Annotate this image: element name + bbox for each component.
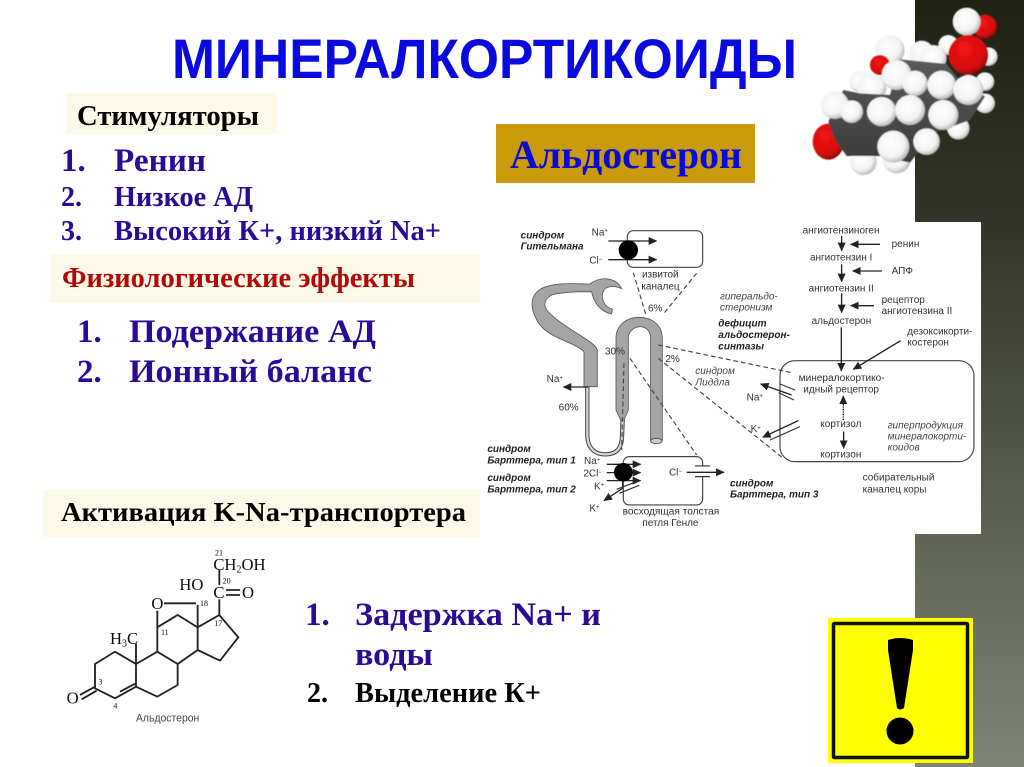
- panel: collecting duct and RAAS cascade: альдостерон: [812, 316, 871, 327]
- panel: stimulators heading: Стимуляторы: [77, 100, 259, 132]
- list: stimulators: Низкое АД: [114, 182, 253, 213]
- list: effects of activation: [305, 597, 601, 709]
- panel: distal convoluted tubule: −: [599, 257, 603, 263]
- chart: aldosterone structural formula: 4: [113, 701, 117, 710]
- panel: K-Na transporter heading: [43, 490, 480, 537]
- list: effects: 1.: [77, 314, 102, 350]
- panel: thick ascending limb: K: [594, 481, 601, 492]
- panel: thick ascending limb: Барттера, тип 2: [487, 485, 576, 496]
- panel: collecting duct and RAAS cascade: кортизон: [820, 450, 861, 461]
- panel: collecting duct and RAAS cascade: коидов: [888, 443, 920, 454]
- background side strip: [915, 0, 1024, 767]
- panel: collecting duct and RAAS cascade: кортизол: [820, 419, 862, 430]
- panel: nephron and receptor diagram: 2%: [665, 354, 680, 365]
- list: effects: Подержание АД: [129, 314, 376, 350]
- list: effects: Ионный баланс: [129, 354, 372, 390]
- chart: aldosterone structural formula: 2: [236, 565, 241, 576]
- panel: thick ascending limb: +: [596, 505, 600, 511]
- arrow: Na reabsorption 60%: [547, 374, 588, 413]
- chart: aldosterone structural formula: 21: [215, 548, 223, 557]
- list: stimulators: [61, 143, 441, 247]
- panel: distal convoluted tubule: синдром: [521, 231, 565, 242]
- chart: aldosterone structural formula: [67, 548, 266, 724]
- panel: K-Na transporter heading: Активация K-Na-транспортера: [61, 497, 467, 527]
- panel: aldosterone label: [496, 124, 755, 183]
- panel: thick ascending limb: +: [601, 483, 605, 489]
- panel: thick ascending limb: Cl: [669, 468, 678, 479]
- panel: distal convoluted tubule: [521, 227, 703, 315]
- chart: aldosterone structural formula: 18: [200, 599, 208, 608]
- panel: collecting duct and RAAS cascade: минералокортико-: [799, 373, 885, 384]
- panel: thick ascending limb: восходящая толстая: [623, 507, 719, 518]
- chart: aldosterone structural formula: 3: [98, 678, 102, 687]
- panel: thick ascending limb: −: [598, 470, 602, 476]
- list: stimulators: 1.: [61, 143, 86, 179]
- panel: nephron and receptor diagram: 30%: [605, 346, 625, 357]
- panel: nephron and receptor diagram: [487, 222, 981, 534]
- chart: aldosterone structural formula: 17: [214, 619, 222, 628]
- list: stimulators: 2.: [61, 182, 82, 213]
- list: stimulators: Высокий К+, низкий Na+: [114, 216, 441, 247]
- panel: thick ascending limb: [487, 444, 724, 529]
- panel: thick ascending limb: синдром: [487, 473, 531, 484]
- panel: collecting duct and RAAS cascade: стеронизм: [720, 303, 773, 314]
- list: effects of activation: Задержка Na+ и: [355, 597, 601, 633]
- chart: aldosterone structural formula: C: [213, 583, 224, 602]
- panel: collecting duct and RAAS cascade: каналец коры: [863, 484, 926, 495]
- panel: thick ascending limb: Na: [584, 456, 597, 467]
- panel: collecting duct and RAAS cascade: синдром: [730, 478, 774, 489]
- panel: nephron and receptor diagram: Лиддла: [694, 377, 730, 388]
- panel: collecting duct and RAAS cascade: АПФ: [892, 266, 913, 277]
- panel: collecting duct and RAAS cascade: ангиотензин II: [809, 283, 874, 294]
- diagram: nephron tubule: [532, 279, 662, 454]
- panel: collecting duct and RAAS cascade: синтазы: [718, 341, 765, 352]
- panel: thick ascending limb: −: [678, 469, 682, 475]
- panel: collecting duct and RAAS cascade: гиперальдо-: [720, 291, 778, 302]
- panel: collecting duct and RAAS cascade: минералокорти-: [888, 432, 967, 443]
- chart: aldosterone structural formula: CH: [213, 555, 236, 574]
- panel: collecting duct and RAAS cascade: Na: [747, 392, 759, 403]
- chart: aldosterone structural formula: OH: [241, 555, 266, 574]
- panel: collecting duct and RAAS cascade: [718, 225, 974, 501]
- panel: distal convoluted tubule: +: [604, 229, 608, 235]
- panel: collecting duct and RAAS cascade: +: [757, 425, 761, 431]
- list: effects of activation: 2.: [307, 678, 328, 709]
- panel: thick ascending limb: Барттера, тип 1: [487, 455, 576, 466]
- title: МИНЕРАЛКОРТИКОИДЫ: [172, 27, 797, 90]
- panel: collecting duct and RAAS cascade: костерон: [907, 337, 949, 348]
- panel: physiological effects heading: Физиологические эффекты: [62, 263, 415, 294]
- panel: collecting duct and RAAS cascade: дезоксикорти-: [907, 326, 972, 337]
- panel: physiological effects heading: [50, 254, 480, 303]
- list: stimulators: 3.: [61, 216, 82, 247]
- panel: thick ascending limb: 2Cl: [583, 469, 598, 480]
- panel: collecting duct and RAAS cascade: Барттера, тип 3: [730, 490, 819, 501]
- panel: collecting duct and RAAS cascade: собирательный: [863, 472, 934, 484]
- panel: nephron and receptor diagram: синдром: [695, 366, 735, 377]
- list: effects: 2.: [77, 354, 102, 390]
- panel: collecting duct and RAAS cascade: ангиотензина II: [882, 306, 952, 317]
- list: stimulators: Ренин: [114, 143, 206, 179]
- list: effects of activation: Выделение К+: [355, 678, 541, 709]
- panel: distal convoluted tubule: 6%: [648, 304, 663, 315]
- panel: collecting duct and RAAS cascade: дефицит: [718, 317, 767, 329]
- panel: distal convoluted tubule: Гительмана: [521, 242, 584, 253]
- chart: aldosterone structural formula: 3: [122, 639, 127, 650]
- panel: thick ascending limb: K: [589, 504, 596, 515]
- list: effects of activation: воды: [355, 637, 433, 673]
- panel: thick ascending limb: синдром: [487, 444, 531, 455]
- arrow: Na reabsorption 60%: 60%: [559, 402, 579, 413]
- panel: distal convoluted tubule: извитой: [642, 269, 679, 280]
- panel: collecting duct and RAAS cascade: ангиотензиноген: [803, 225, 879, 236]
- arrow: Na reabsorption 60%: Na: [547, 374, 559, 385]
- panel: collecting duct and RAAS cascade: ангиотензин I: [810, 253, 872, 264]
- panel: collecting duct and RAAS cascade: рецептор: [882, 295, 925, 306]
- chart: aldosterone structural formula: Альдостерон: [136, 712, 199, 724]
- panel: aldosterone label: Альдостерон: [510, 132, 742, 177]
- panel: collecting duct and RAAS cascade: альдостерон-: [718, 330, 790, 341]
- chart: aldosterone structural formula: O: [151, 594, 163, 613]
- icon: space-filling molecule: [813, 8, 998, 175]
- panel: thick ascending limb: петля Генле: [642, 518, 699, 529]
- chart: aldosterone structural formula: O: [67, 688, 79, 707]
- panel: distal convoluted tubule: каналец: [641, 281, 680, 292]
- chart: aldosterone structural formula: O: [242, 583, 254, 602]
- chart: aldosterone structural formula: C: [127, 629, 138, 648]
- panel: collecting duct and RAAS cascade: гиперпродукция: [888, 420, 964, 431]
- panel: collecting duct and RAAS cascade: ренин: [892, 239, 919, 250]
- dashed leader lines: [630, 273, 792, 458]
- panel: distal convoluted tubule: Cl: [589, 256, 599, 267]
- panel: distal convoluted tubule: Na: [592, 227, 604, 238]
- list: effects: [77, 314, 376, 390]
- panel: thick ascending limb: +: [597, 457, 601, 463]
- panel: stimulators heading: [66, 93, 277, 134]
- chart: aldosterone structural formula: HO: [179, 575, 203, 594]
- chart: aldosterone structural formula: H: [110, 629, 122, 648]
- panel: collecting duct and RAAS cascade: +: [759, 394, 763, 400]
- icon: warning sign: [828, 618, 973, 763]
- list: effects of activation: 1.: [305, 597, 330, 633]
- chart: aldosterone structural formula: 20: [223, 576, 231, 585]
- chart: aldosterone structural formula: 11: [161, 628, 169, 637]
- panel: collecting duct and RAAS cascade: K: [751, 424, 757, 435]
- panel: collecting duct and RAAS cascade: идный рецептор: [803, 384, 879, 395]
- arrow: Na reabsorption 60%: +: [559, 375, 563, 381]
